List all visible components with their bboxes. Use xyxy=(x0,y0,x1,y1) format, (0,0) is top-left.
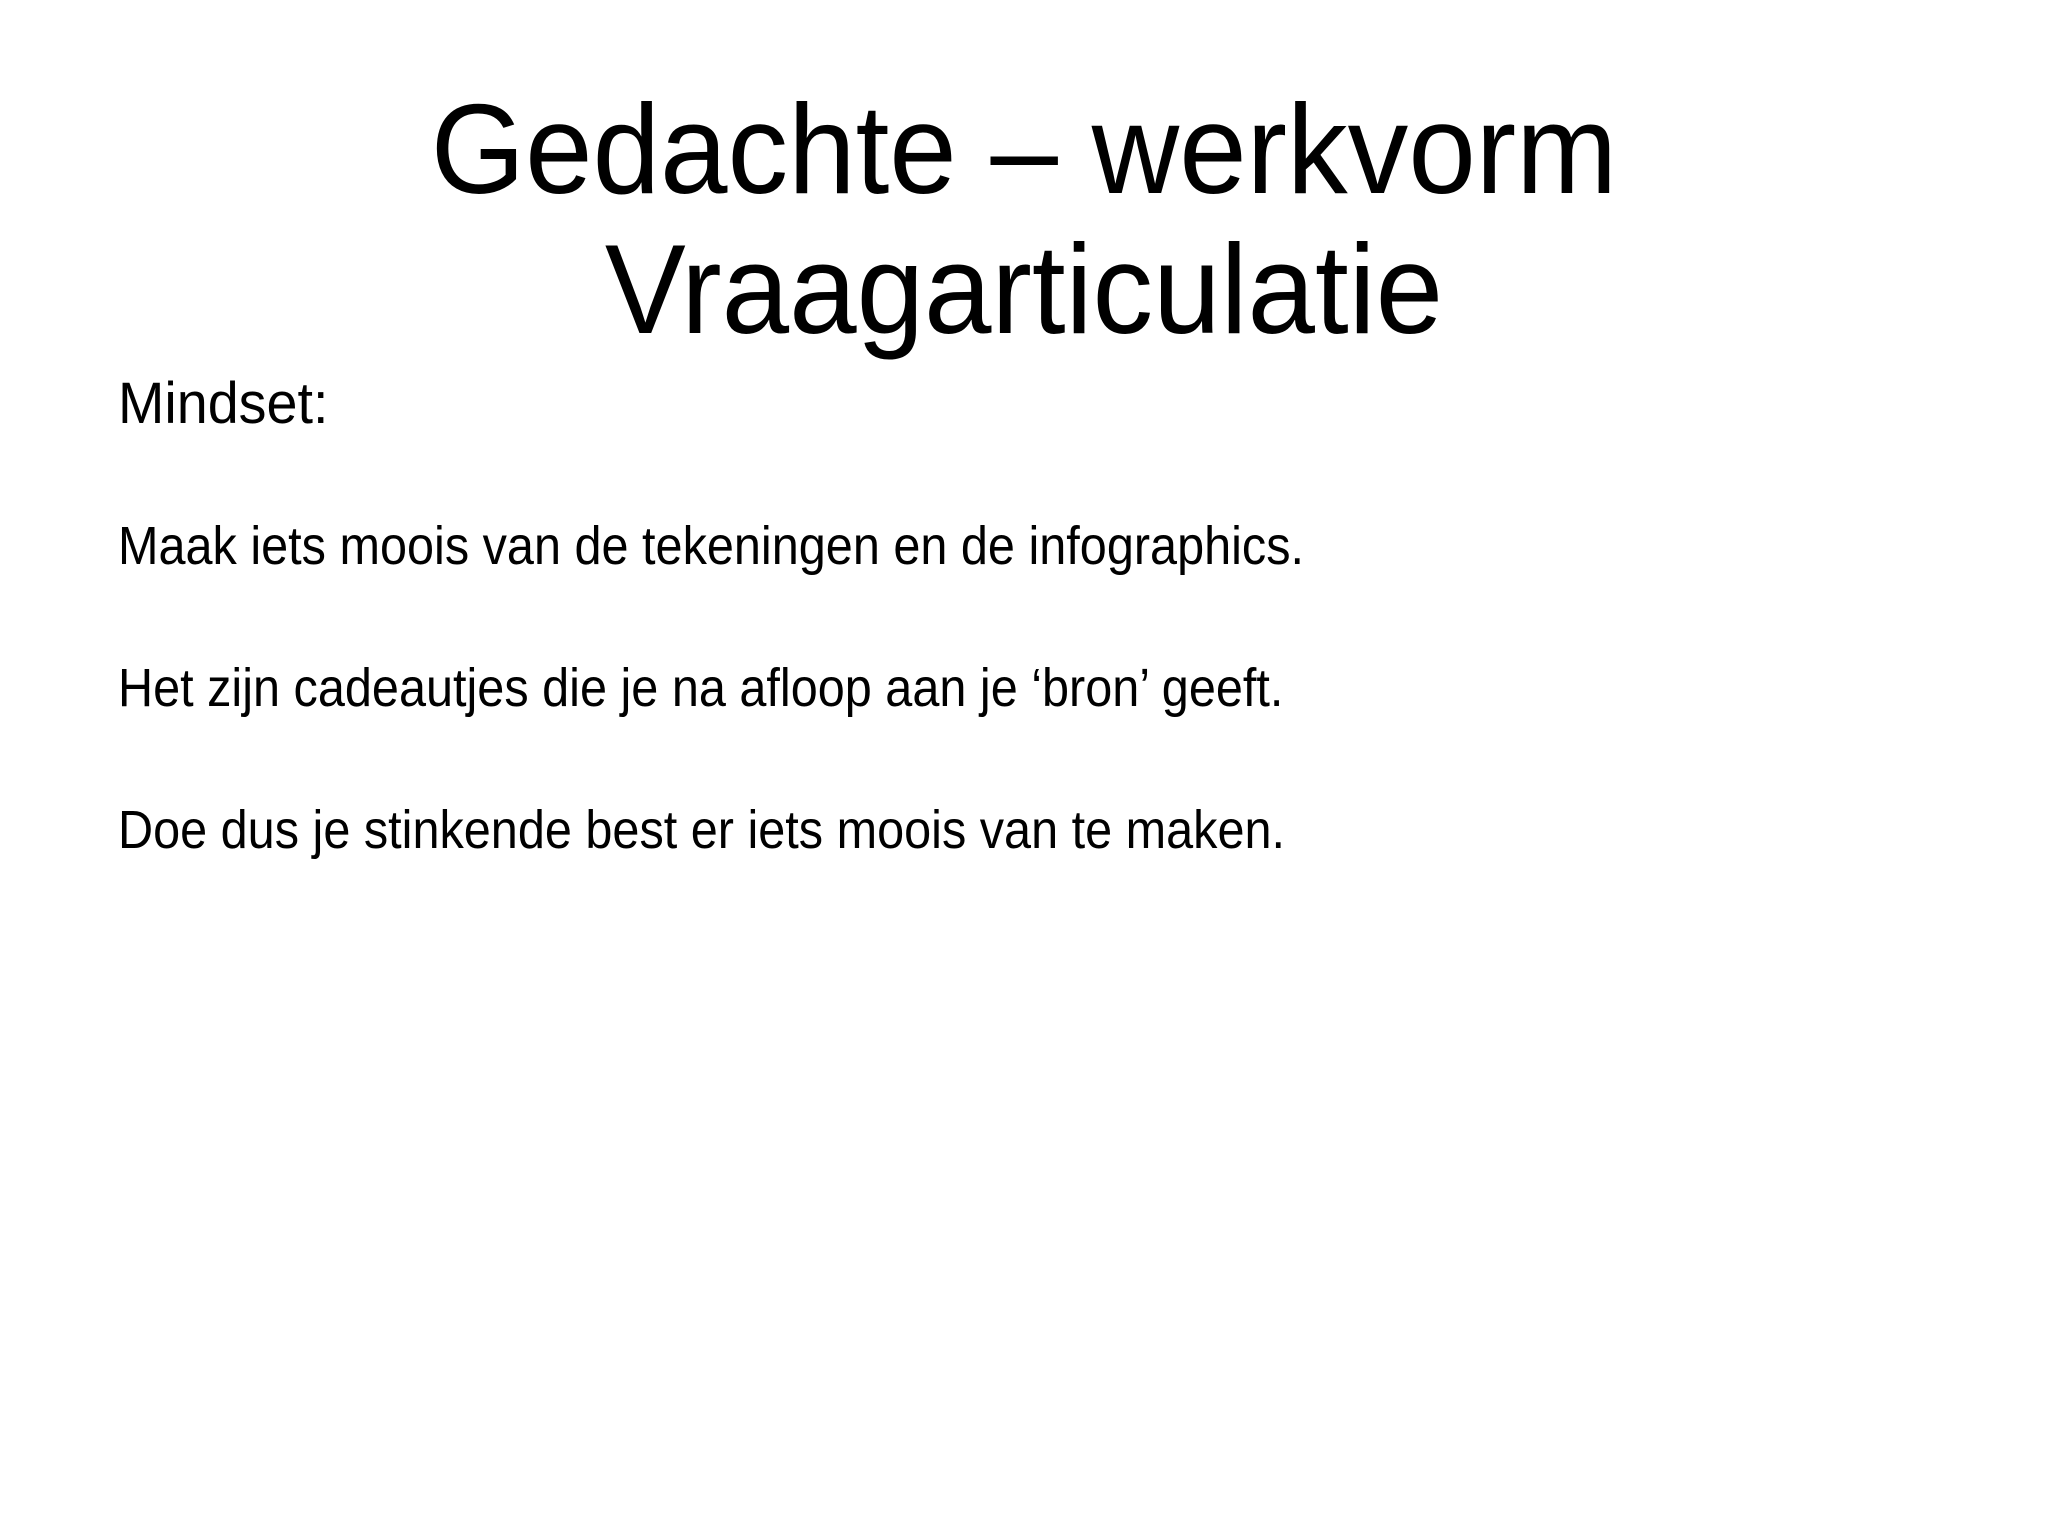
title line 1: Gedachte – werkvorm xyxy=(431,78,1617,220)
text block 2: Het zijn cadeautjes die je na afloop aan je ‘bron’ geeft. xyxy=(118,658,1283,718)
text block 1: Maak iets moois van de tekeningen en de infographics. xyxy=(118,516,1304,576)
title xyxy=(431,78,1617,360)
heading: mindset: Mindset: xyxy=(118,371,328,436)
title line 2: Vraagarticulatie xyxy=(605,218,1443,360)
text block 3: Doe dus je stinkende best er iets moois van te maken. xyxy=(118,800,1285,860)
